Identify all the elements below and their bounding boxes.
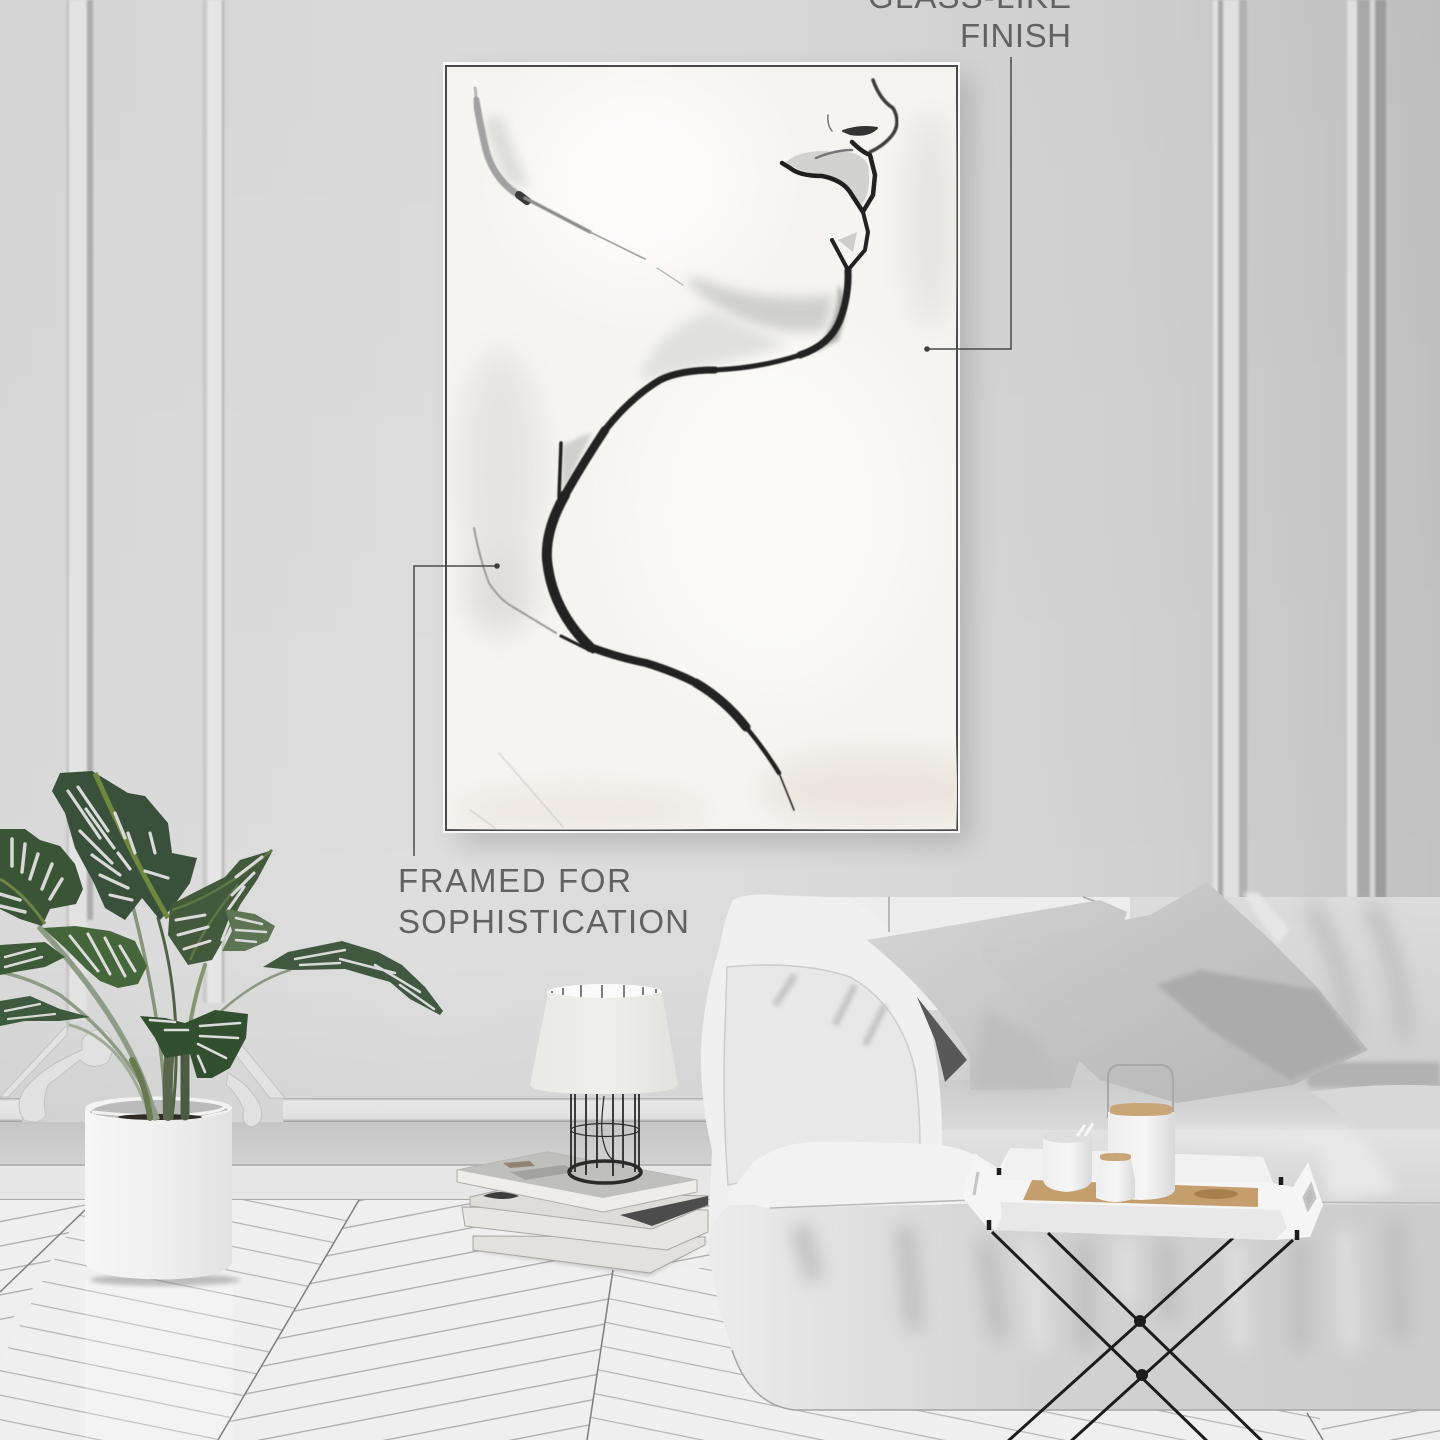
- leaf: right middle: [222, 909, 275, 951]
- jar handle: [1108, 1065, 1173, 1120]
- stacked books: [457, 1152, 708, 1276]
- tall jar: [1108, 1103, 1175, 1200]
- potted plant: [0, 771, 443, 1286]
- floor: [0, 1200, 1440, 1440]
- bottom book: [473, 1236, 705, 1273]
- callout text: FINISH: [960, 17, 1071, 54]
- leaf: large top: [52, 771, 197, 920]
- floor shadow: [470, 1240, 708, 1276]
- leader dot: [924, 346, 930, 352]
- ink figure: face: [782, 80, 897, 270]
- leg pivots: [1134, 1315, 1148, 1381]
- leader line: [414, 566, 497, 856]
- sofa: [701, 882, 1440, 1410]
- cup: [1043, 1123, 1093, 1192]
- front pillow: [982, 882, 1368, 1103]
- ornamental scrolls: [0, 1025, 285, 1127]
- callout: framed for sophistication: [398, 563, 689, 940]
- sofa fabric folds: [800, 1220, 1400, 1350]
- callout text: [868, 0, 1071, 54]
- sofa back left: [780, 897, 1130, 1010]
- lamp shade inside: [547, 984, 662, 1000]
- table lamp: [530, 984, 678, 1183]
- tray handle cut-outs: [974, 1172, 1315, 1209]
- small jar: [1096, 1153, 1135, 1202]
- callout: glass-like finish: [868, 0, 1071, 352]
- leader dot: [494, 563, 500, 569]
- tray table: [962, 1065, 1323, 1440]
- callout text: SOPHISTICATION: [398, 903, 689, 940]
- leader line: [927, 57, 1011, 349]
- top book: [457, 1152, 697, 1212]
- leaf: lower centre: [140, 1010, 248, 1078]
- leaf: far right: [263, 941, 443, 1015]
- rear pillow: [917, 997, 967, 1082]
- pot: [85, 1096, 232, 1280]
- canvas: [446, 66, 957, 830]
- frame shadow: [458, 76, 970, 844]
- tray hooks: [989, 1168, 1297, 1240]
- lamp shade slats: [552, 985, 656, 999]
- wooden board: [1023, 1180, 1258, 1207]
- sofa seat cushions: [935, 1080, 1440, 1140]
- leaf: middle left: [0, 942, 65, 975]
- lamp cage: [569, 1094, 641, 1183]
- second book: [470, 1190, 708, 1229]
- leaf: upper right: [168, 850, 273, 965]
- stems: [0, 895, 290, 1118]
- tray back and interior: [962, 1148, 1323, 1240]
- ink figure: shoulder stroke: [475, 88, 683, 285]
- leaf: lower left: [0, 996, 90, 1026]
- ink figure: neck line: [470, 270, 848, 828]
- wall moulding: left panel: [67, 0, 224, 1029]
- canvas washes: [447, 98, 957, 830]
- third book: [462, 1207, 708, 1250]
- lamp shade: [530, 993, 678, 1094]
- wall moulding: right panel: [1213, 0, 1386, 900]
- sofa front cushion: [708, 1205, 1440, 1410]
- table legs: [992, 1232, 1293, 1440]
- sofa arm: [701, 895, 942, 1240]
- white frame: [443, 62, 960, 833]
- sofa back right: [1130, 897, 1440, 1080]
- pot shadow: [90, 1274, 240, 1286]
- tray front panel: [995, 1202, 1287, 1240]
- leaf: upper left: [0, 829, 83, 926]
- callout text: [398, 862, 689, 940]
- callout text: FRAMED FOR: [398, 862, 631, 899]
- framed artwork: [443, 62, 1000, 844]
- lower wall rail and baseboard: [0, 1098, 720, 1200]
- leaf: centre left: [43, 926, 147, 988]
